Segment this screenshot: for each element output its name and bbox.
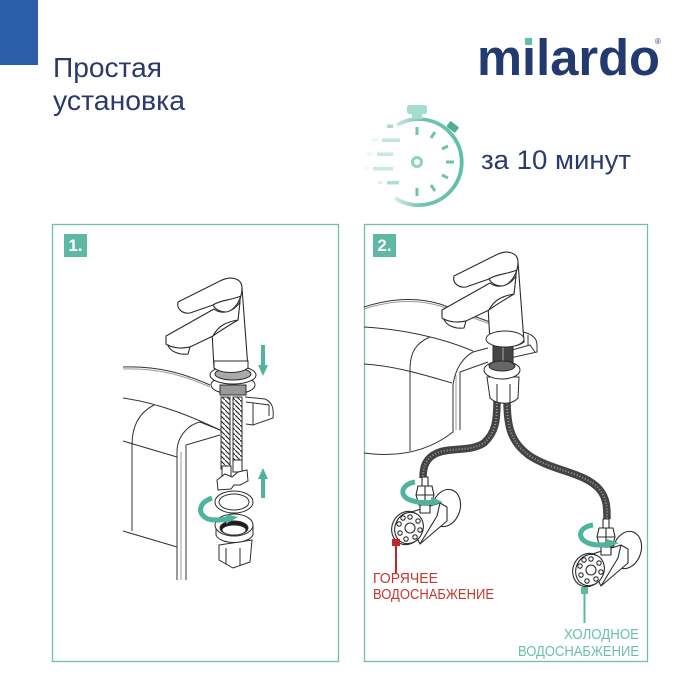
cold water label: ВОДОСНАБЖЕНИЕ [518,644,639,660]
arrow: cold valve rotation [581,525,619,548]
cold water label: ХОЛОДНОЕ [564,627,639,643]
hot marker [392,539,400,573]
faucet [442,252,524,346]
cold marker [581,587,588,623]
title: установка [53,85,185,116]
panel 1: faucet insertion [52,224,338,662]
logo: milardo: ® [655,37,661,46]
icon: stopwatch [365,105,462,205]
time caption: за 10 минут [481,145,631,175]
sink outline [123,367,273,580]
hot water label: ВОДОСНАБЖЕНИЕ [373,587,494,603]
sealing ring [215,491,253,513]
mounting nut [215,514,253,568]
hot water label: ГОРЯЧЕЕ [373,571,438,587]
logo: milardo: milardo [477,29,660,86]
arrow: up [258,468,268,498]
step badge 2: 2. [377,236,392,255]
faucet base and mounting nut [484,331,524,403]
arrow: hot valve rotation [403,482,443,506]
cold water valve [567,519,646,592]
arrow: down [258,345,268,376]
braided hoses [221,397,242,469]
arrow: rotation [201,498,238,524]
title: Простая [53,52,162,83]
title [53,52,185,116]
hoses to valves [423,400,607,519]
hose nuts [217,460,248,490]
blue corner block [0,0,38,65]
step badge 2 [373,234,396,257]
cold water label [518,627,639,660]
hot water valve [386,477,465,550]
panel 2: hose connection [364,224,648,662]
faucet [166,278,248,372]
sink outline [364,299,537,454]
step badge 1 [64,234,87,257]
step badge 1: 1. [68,236,83,255]
mounting flange and thread [210,361,256,395]
hot water label [373,571,494,603]
